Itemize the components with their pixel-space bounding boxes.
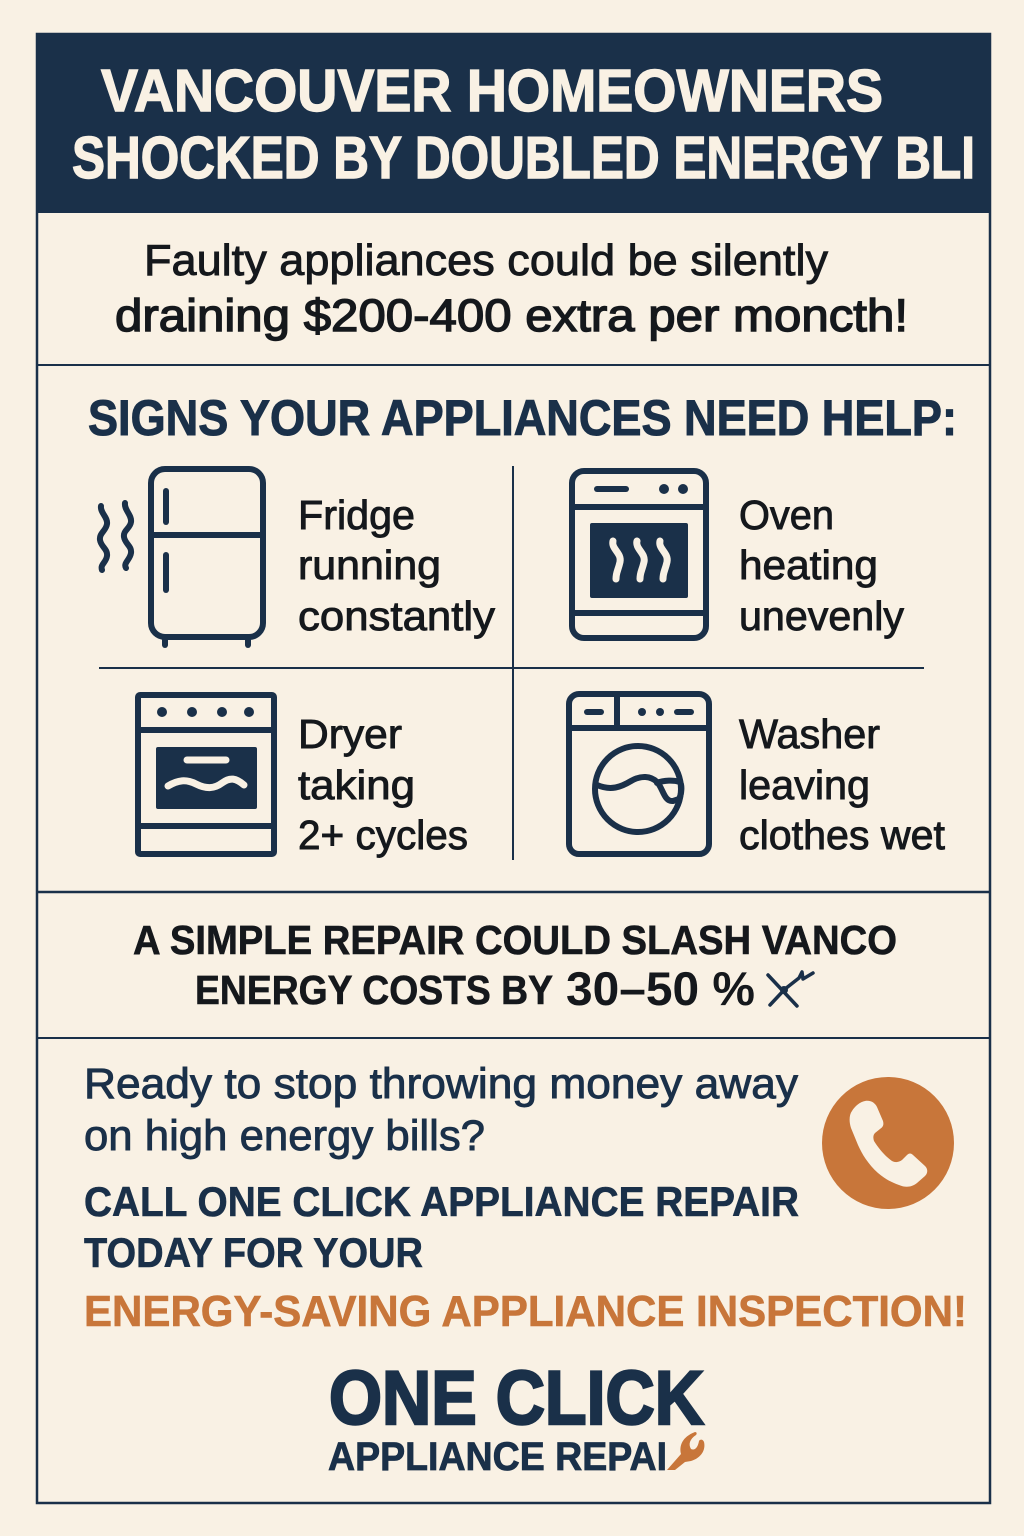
subheading: Faulty appliances could be silently: [144, 236, 828, 285]
text: fridge: Fridge: [298, 492, 415, 538]
text: washer: Washer: [739, 711, 880, 757]
title: [72, 58, 975, 191]
text: question: [84, 1060, 799, 1160]
panel: signs your appliances need help: [88, 390, 957, 860]
panel: call to action: [84, 1060, 967, 1336]
panel: savings message: 30–50 %: [566, 962, 755, 1015]
title: VANCOUVER HOMEOWNERS: [101, 58, 883, 124]
text: call instruction: [84, 1178, 799, 1276]
icon: dryer: [138, 695, 274, 854]
text: washer: [739, 711, 946, 858]
text: call instruction: TODAY FOR YOUR: [84, 1229, 423, 1276]
text: oven: [739, 492, 904, 639]
text: fridge: constantly: [298, 593, 496, 639]
logo: ONE CLICK: [329, 1356, 704, 1441]
icon: phone: [822, 1077, 954, 1209]
text: oven: heating: [739, 542, 878, 588]
text: question: on high energy bills?: [84, 1112, 485, 1160]
icon: wrench: [667, 1432, 704, 1470]
icon: oven: [572, 471, 706, 638]
subheading: [115, 236, 908, 341]
text: dryer: Dryer: [298, 711, 402, 757]
heading: SIGNS YOUR APPLIANCES NEED HELP:: [88, 390, 957, 446]
panel: savings message: ENERGY COSTS BY: [195, 967, 553, 1013]
icon: fridge: [100, 469, 263, 645]
subheading: draining $200-400 extra per moncth!: [115, 290, 908, 341]
text: oven: Oven: [739, 492, 834, 538]
panel: title banner: [36, 33, 991, 213]
logo: APPLIANCE REPAI: [328, 1435, 667, 1479]
text: washer: clothes wet: [739, 812, 946, 858]
panel: savings message: [133, 917, 897, 1015]
text: washer: leaving: [739, 762, 870, 808]
text: oven: unevenly: [739, 593, 904, 639]
text: dryer: 2+ cycles: [298, 812, 468, 858]
text: dryer: [298, 711, 468, 858]
icon: repair tools: [768, 972, 813, 1006]
logo: [328, 1356, 704, 1479]
text: inspection offer: ENERGY-SAVING APPLIANCE INSPECTION!: [84, 1287, 967, 1336]
text: fridge: running: [298, 542, 441, 588]
icon: washer: [569, 694, 709, 854]
text: dryer: taking: [298, 762, 415, 808]
text: question: Ready to stop throwing money away: [84, 1060, 799, 1108]
text: call instruction: CALL ONE CLICK APPLIANCE REPAIR: [84, 1178, 799, 1225]
panel: savings message: A SIMPLE REPAIR COULD SLASH VANCO: [133, 917, 897, 963]
text: fridge: [298, 492, 496, 639]
